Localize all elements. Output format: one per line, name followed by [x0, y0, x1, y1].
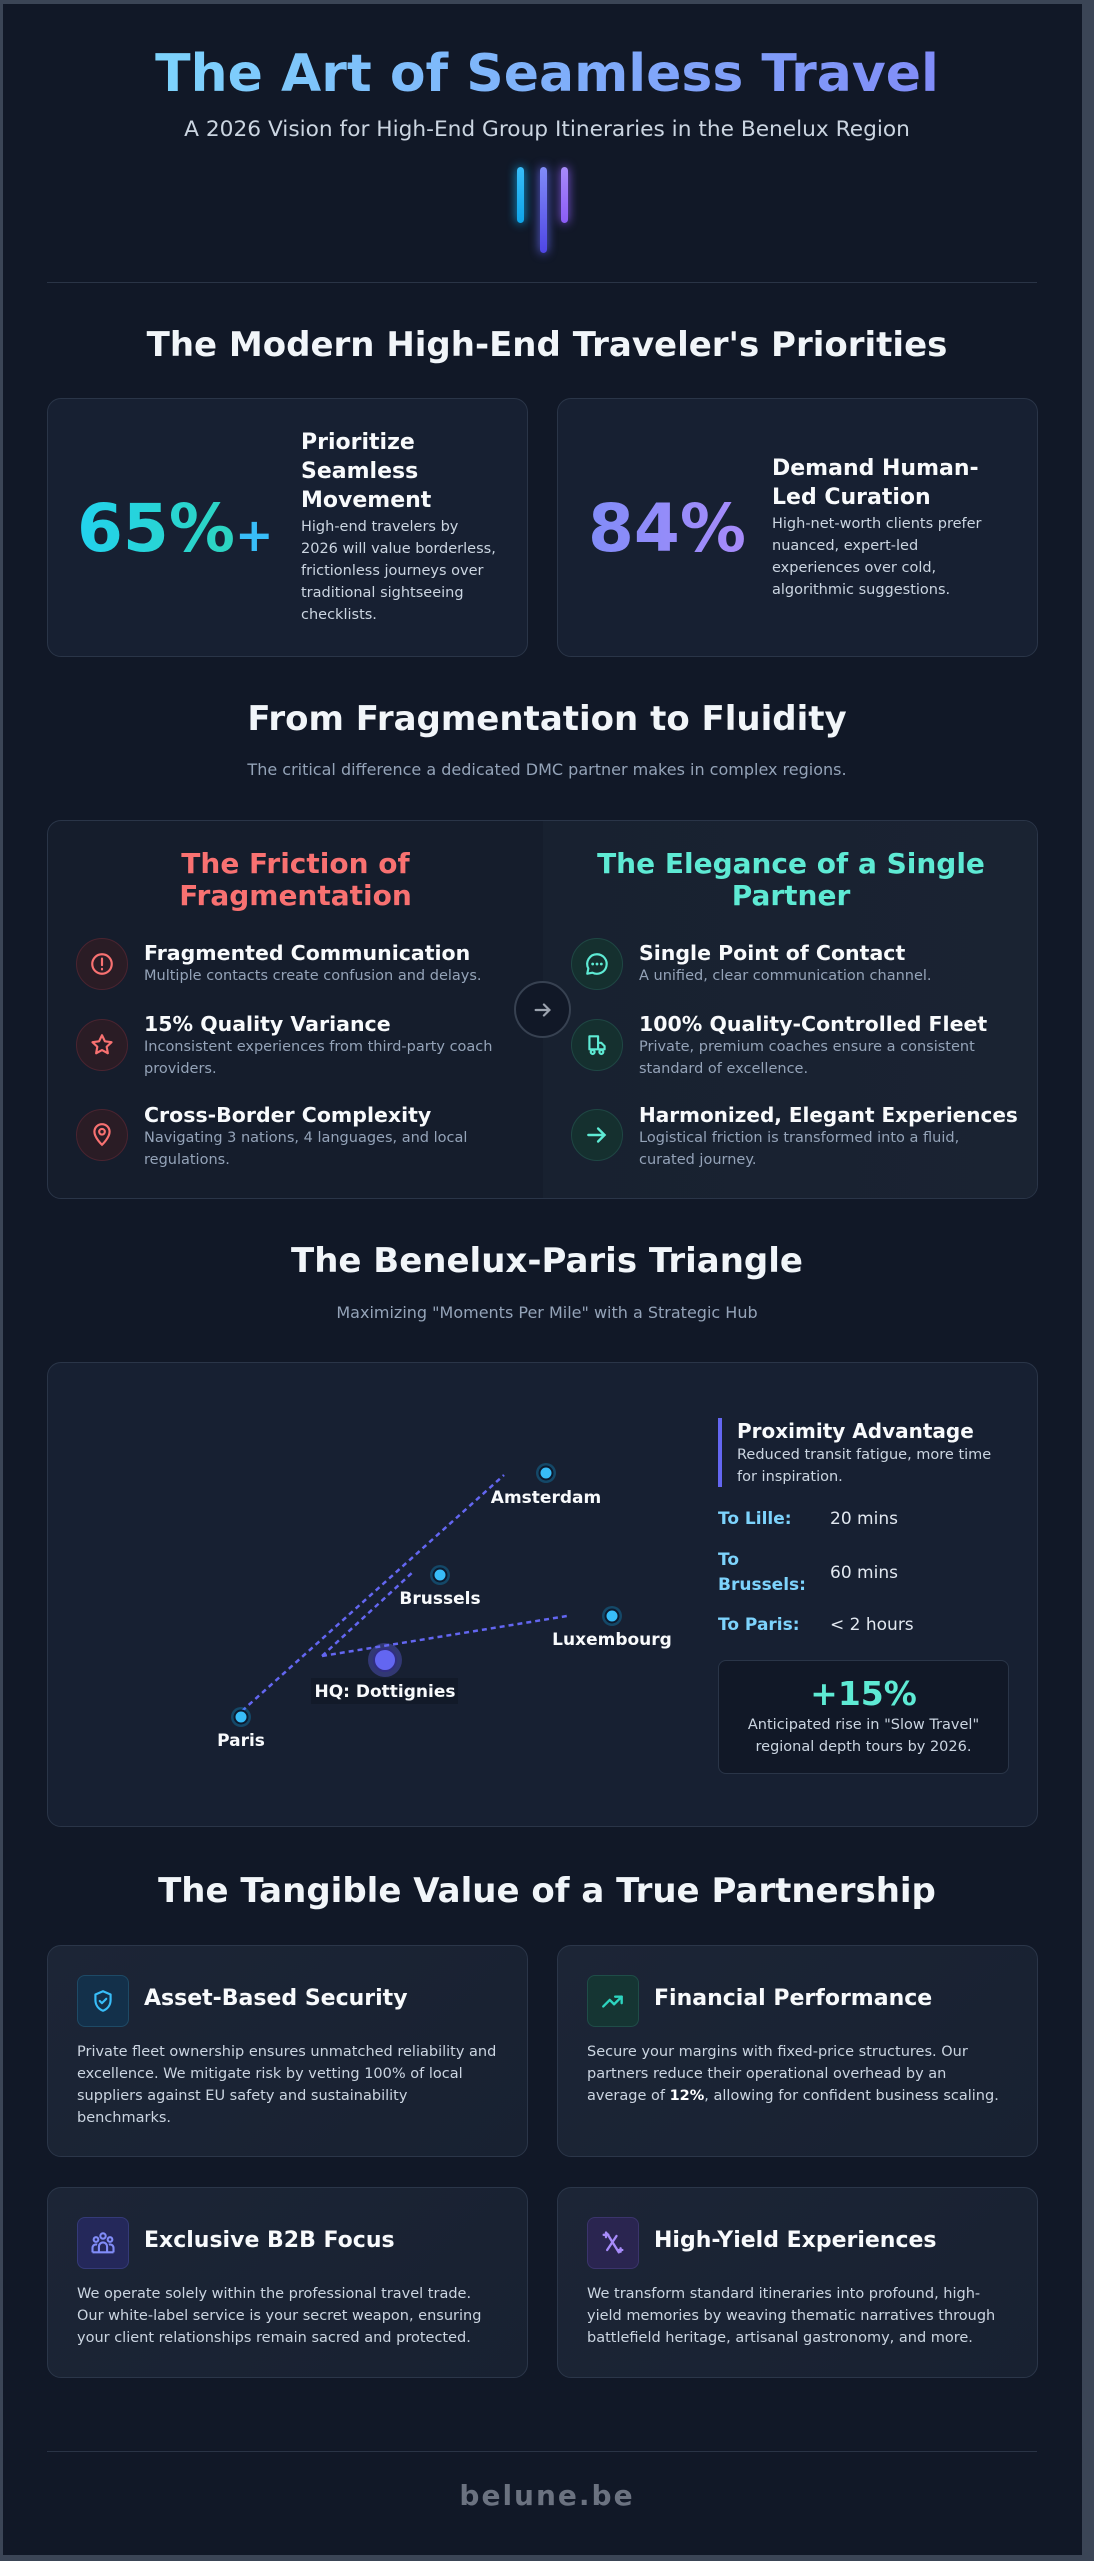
item: cross-border: Navigating 3 nations, 4 languages, and local: [144, 1130, 467, 1146]
card: high-yield: yield memories by weaving thematic narratives through: [587, 2308, 995, 2324]
stat text: traditional sightseeing: [301, 585, 464, 601]
arrow: center: [514, 981, 571, 1038]
item: harmonized: Harmonized, Elegant Experiences: [639, 1103, 1018, 1127]
card: B2B focus: Our white-label service is your secret weapon, ensuring: [77, 2308, 481, 2324]
item: quality variance: Inconsistent experiences from third-party coach: [144, 1039, 492, 1055]
stat text: [301, 430, 496, 623]
card: financial performance: [557, 1945, 1038, 2157]
callout: proximity: Proximity Advantage: [737, 1419, 974, 1443]
subheading: The critical difference a dedicated DMC partner makes in complex regions.: [247, 760, 847, 779]
item: fragmented communication: Multiple contacts create confusion and delays.: [144, 968, 482, 984]
card: high-yield: High-Yield Experiences: [654, 2228, 937, 2253]
subheading: Maximizing "Moments Per Mile" with a Strategic Hub: [336, 1303, 758, 1322]
card: B2B focus: [47, 2187, 528, 2378]
item: harmonized: Logistical friction is transformed into a fluid,: [639, 1130, 959, 1146]
callout: +15%: +15%: [810, 1674, 917, 1713]
footer: brand: belune.be: [459, 2479, 635, 2512]
heading: priorities: The Modern High-End Traveler's Priorities: [147, 325, 947, 365]
heading: triangle: The Benelux-Paris Triangle: [291, 1241, 803, 1281]
heading: fragmentation: From Fragmentation to Fluidity: [247, 699, 847, 739]
item: quality variance: [76, 1012, 492, 1077]
dot: Amsterdam: Amsterdam: [491, 1488, 601, 1508]
stat number 84: 84%: [588, 490, 746, 567]
callout: proximity: [718, 1418, 1018, 1487]
dot: Luxembourg: [552, 1606, 672, 1650]
distances: To Lille:: [718, 1509, 792, 1529]
stat text: frictionless journeys over: [301, 563, 484, 579]
item: fragmented communication: Fragmented Communication: [144, 941, 470, 965]
card: asset security: [47, 1945, 528, 2157]
callout: proximity: Reduced transit fatigue, more time: [737, 1447, 991, 1463]
dot: Paris: [217, 1707, 265, 1751]
item: fragmented communication: [76, 938, 482, 990]
item: harmonized: curated journey.: [639, 1152, 756, 1168]
distances: To: [718, 1550, 739, 1570]
stat text: High-end travelers by: [301, 519, 458, 535]
dot: Amsterdam: [491, 1463, 601, 1508]
heading: friction: The Friction of: [181, 847, 410, 880]
panel: comparison: [47, 820, 1038, 1199]
card: B2B focus: your client relationships remain sacred and protected.: [77, 2330, 471, 2346]
distances: To Paris:: [718, 1615, 800, 1635]
dot: Paris: Paris: [217, 1731, 265, 1751]
card: asset security: suppliers against EU safety and sustainability: [77, 2088, 407, 2104]
heading: elegance: The Elegance of a Single: [597, 847, 985, 880]
distances: < 2 hours: [830, 1615, 914, 1635]
dot: HQ: [311, 1643, 458, 1704]
card: financial performance: partners reduce their operational overhead by an: [587, 2066, 946, 2082]
card: high-yield: [557, 2187, 1038, 2378]
callout: +15%: Anticipated rise in "Slow Travel": [748, 1717, 979, 1733]
panel: stat 84%: [557, 398, 1038, 657]
stat text: [772, 456, 982, 598]
distances: 20 mins: [830, 1509, 898, 1529]
dot: Brussels: Brussels: [399, 1589, 481, 1609]
distances: Brussels:: [718, 1575, 806, 1595]
item: quality variance: providers.: [144, 1061, 217, 1077]
stat text: checklists.: [301, 607, 377, 623]
callout: proximity: for inspiration.: [737, 1469, 843, 1485]
card: B2B focus: We operate solely within the professional travel trade.: [77, 2286, 471, 2302]
distances: [718, 1509, 914, 1635]
heading: elegance: [597, 847, 985, 912]
card: high-yield: We transform standard itineraries into profound, high-: [587, 2286, 980, 2302]
dot: Brussels: [399, 1565, 481, 1609]
card: B2B focus: Exclusive B2B Focus: [144, 2228, 395, 2253]
stat text: algorithmic suggestions.: [772, 582, 950, 598]
heading: tangible value: The Tangible Value of a True Partnership: [158, 1871, 936, 1911]
stat text: Prioritize Seamless Movement: [301, 430, 431, 513]
card: financial performance: Financial Performance: [654, 1986, 932, 2011]
stat text: 2026 will value borderless,: [301, 541, 496, 557]
callout: +15%: [718, 1660, 1009, 1774]
item: cross-border: Cross-Border Complexity: [144, 1103, 431, 1127]
panel: stat 65%: [47, 398, 528, 657]
panel: map: [47, 1362, 1038, 1827]
stat number 65: 65%+: [77, 490, 274, 567]
card: high-yield: battlefield heritage, artisanal gastronomy, and more.: [587, 2330, 973, 2346]
card: financial performance: Secure your margins with fixed-price structures. Our: [587, 2044, 968, 2060]
item: single point: [571, 938, 932, 990]
card: asset security: benchmarks.: [77, 2110, 171, 2126]
item: fleet: Private, premium coaches ensure a consistent: [639, 1039, 975, 1055]
card: asset security: Private fleet ownership ensures unmatched reliability and: [77, 2044, 496, 2060]
card: asset security: excellence. We mitigate risk by vetting 100% of local: [77, 2066, 463, 2082]
card: financial performance: average of 12%, allowing for confident business scaling.: [587, 2088, 999, 2104]
item: quality variance: 15% Quality Variance: [144, 1012, 391, 1036]
subtitle: A 2026 Vision for High-End Group Itineraries in the Benelux Region: [184, 117, 910, 142]
item: fleet: 100% Quality-Controlled Fleet: [639, 1012, 987, 1036]
distances: 60 mins: [830, 1563, 898, 1583]
heading: elegance: Partner: [732, 879, 850, 912]
heading: friction: [179, 847, 412, 912]
item: cross-border: [76, 1103, 467, 1168]
item: single point: A unified, clear communication channel.: [639, 968, 932, 984]
item: fleet: [571, 1012, 987, 1077]
icon: glowing bars: [509, 161, 576, 259]
item: fleet: standard of excellence.: [639, 1061, 808, 1077]
item: single point: Single Point of Contact: [639, 941, 905, 965]
callout: +15%: regional depth tours by 2026.: [756, 1739, 971, 1755]
dot: Luxembourg: Luxembourg: [552, 1630, 672, 1650]
stat text: Demand Human-Led Curation: [772, 456, 979, 510]
item: harmonized: [571, 1103, 1018, 1168]
stat text: nuanced, expert-led: [772, 538, 918, 554]
item: cross-border: regulations.: [144, 1152, 230, 1168]
heading: friction: Fragmentation: [179, 879, 412, 912]
dot: HQ: HQ: Dottignies: [314, 1682, 456, 1702]
title: The Art of Seamless Travel: [155, 44, 939, 104]
stat text: High-net-worth clients prefer: [772, 516, 982, 532]
stat text: experiences over cold,: [772, 560, 936, 576]
card: asset security: Asset-Based Security: [144, 1986, 408, 2011]
